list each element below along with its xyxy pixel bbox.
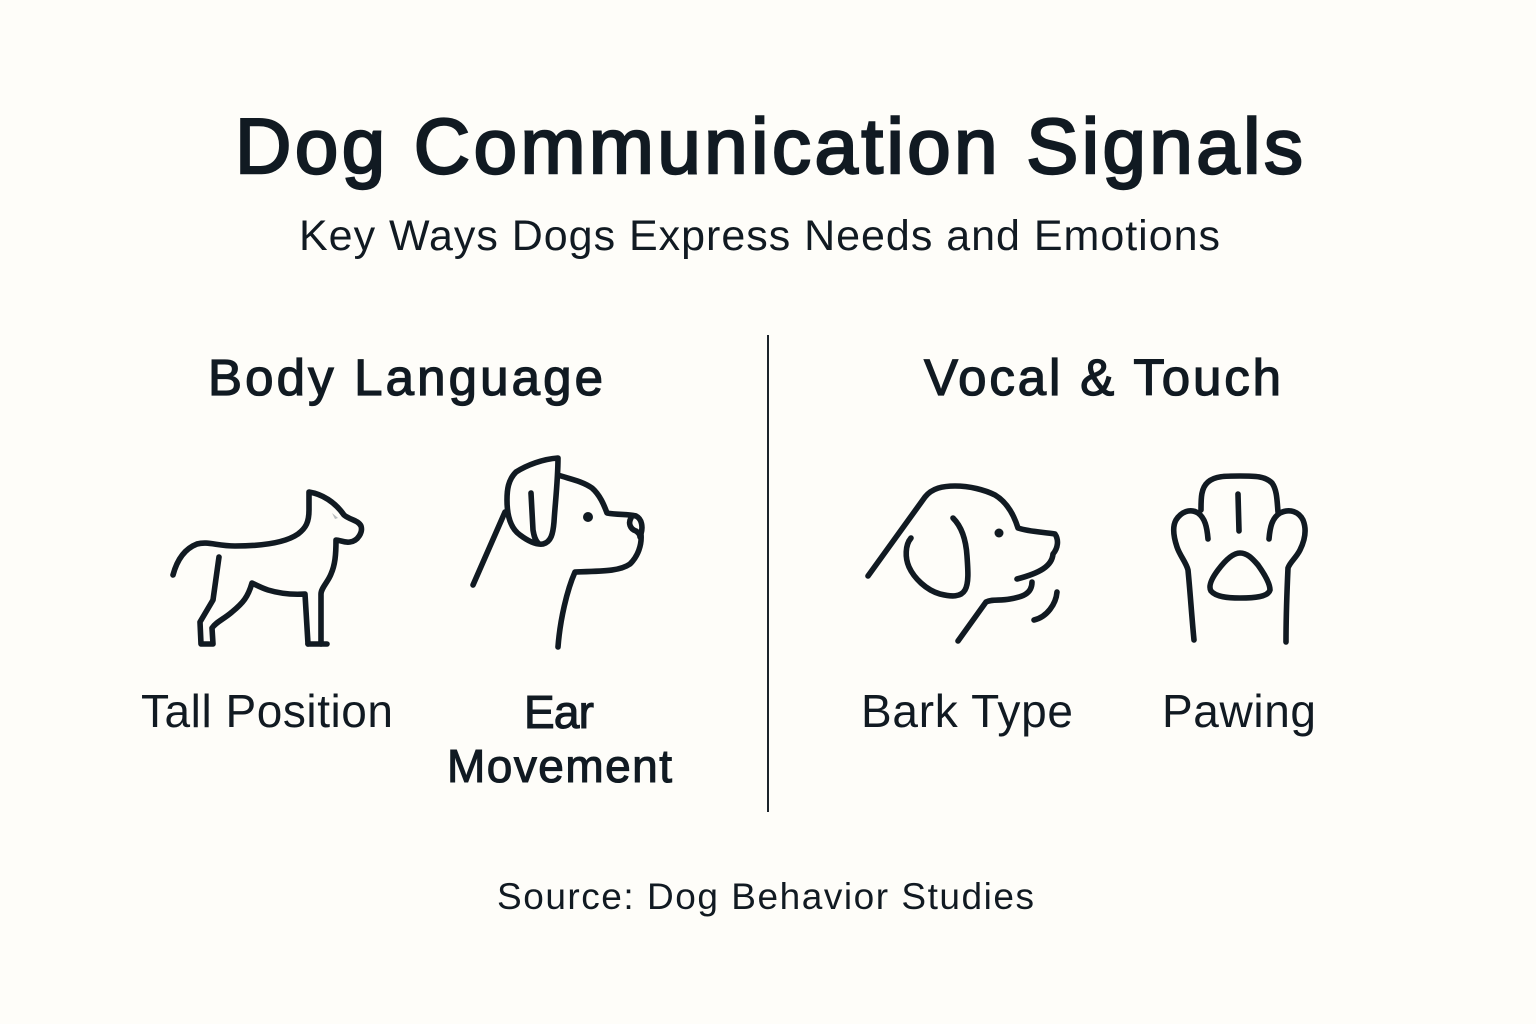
- source note: Source: Dog Behavior Studies: [497, 876, 1034, 917]
- title: Dog Communication Signals: [235, 102, 1303, 190]
- label: Ear Movement: Ear: [524, 686, 594, 738]
- icon: barking dog: [868, 486, 1057, 641]
- subtitle: Key Ways Dogs Express Needs and Emotions: [299, 212, 1220, 260]
- label: Pawing: Pawing: [1162, 685, 1316, 737]
- icon: ear smudge on standing dog: [332, 513, 338, 519]
- label: Ear Movement: Movement: [447, 740, 672, 792]
- heading: Vocal & Touch: Vocal & Touch: [924, 349, 1281, 406]
- heading: Body Language: Body Language: [208, 349, 603, 406]
- icon: raised paw: [1174, 476, 1305, 642]
- icon: dog head with ear: [473, 458, 642, 647]
- label: Bark Type: Bark Type: [861, 685, 1073, 737]
- label: Ear Movement: [447, 686, 672, 792]
- label: Tall Position: Tall Position: [141, 685, 393, 737]
- icon: standing dog: [173, 492, 361, 644]
